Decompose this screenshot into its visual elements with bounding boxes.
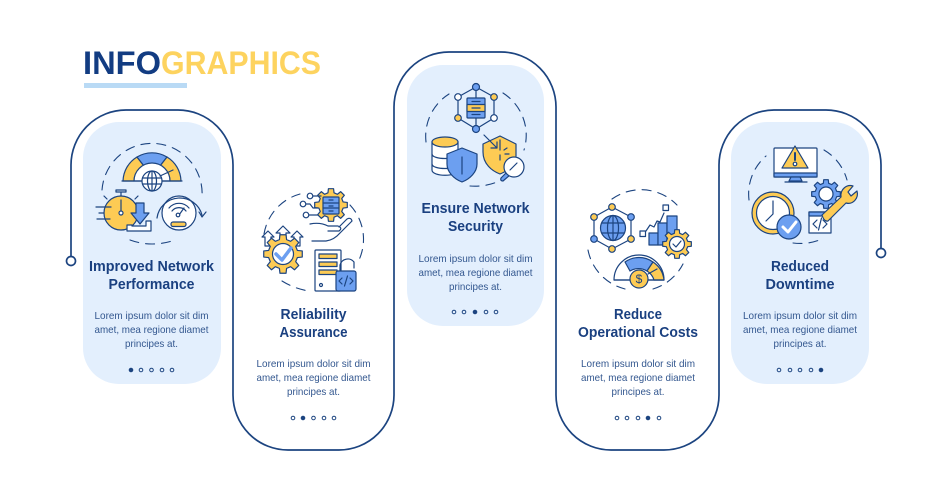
text block: Lorem ipsum dolor sit dim — [94, 311, 208, 322]
text block: amet, mea regione diamet — [581, 373, 695, 384]
heading: Ensure Network — [422, 201, 530, 217]
text block: amet, mea regione diamet — [256, 373, 371, 384]
icon: network speed — [96, 143, 206, 244]
panel: ensure network security — [407, 65, 544, 326]
icon: network security — [426, 84, 526, 186]
pagination dots — [129, 368, 174, 372]
pagination dots — [615, 416, 661, 420]
text block: Lorem ipsum dolor sit dim — [743, 311, 857, 322]
icon: downtime — [749, 146, 857, 243]
text block: amet, mea regione diamet — [743, 325, 857, 336]
text block: Lorem ipsum dolor sit dim — [418, 254, 532, 265]
text block: principes at. — [449, 282, 502, 293]
connector outline — [66, 52, 886, 450]
title — [83, 45, 321, 88]
heading: Reduced — [771, 259, 829, 275]
icon: operational costs — [588, 190, 691, 289]
heading: Downtime — [766, 277, 834, 293]
panel: improved network performance — [83, 122, 221, 384]
heading: Reliability — [280, 307, 346, 323]
panel: reliability assurance — [256, 189, 371, 420]
text block: principes at. — [612, 387, 664, 398]
panel: reduce operational costs — [578, 190, 698, 420]
pagination dots — [777, 368, 823, 372]
icon: reliability — [262, 189, 364, 291]
title: INFO — [83, 45, 161, 81]
text block: principes at. — [287, 387, 340, 398]
title: GRAPHICS — [161, 45, 321, 81]
heading: Operational Costs — [578, 325, 698, 341]
text block: principes at. — [774, 339, 826, 350]
pagination dots — [291, 416, 336, 420]
text block: amet, mea regione diamet — [418, 268, 533, 279]
panel: reduced downtime — [731, 122, 869, 384]
heading: Performance — [108, 277, 194, 293]
heading: Reduce — [614, 307, 662, 323]
text block: Lorem ipsum dolor sit dim — [256, 359, 370, 370]
text block: Lorem ipsum dolor sit dim — [581, 359, 695, 370]
text block: principes at. — [125, 339, 178, 350]
heading: Security — [448, 219, 503, 235]
text block: amet, mea regione diamet — [94, 325, 209, 336]
pagination dots — [452, 310, 498, 314]
icon: operational costs: $ — [636, 272, 643, 286]
heading: Assurance — [280, 325, 348, 341]
heading: Improved Network — [89, 259, 215, 275]
